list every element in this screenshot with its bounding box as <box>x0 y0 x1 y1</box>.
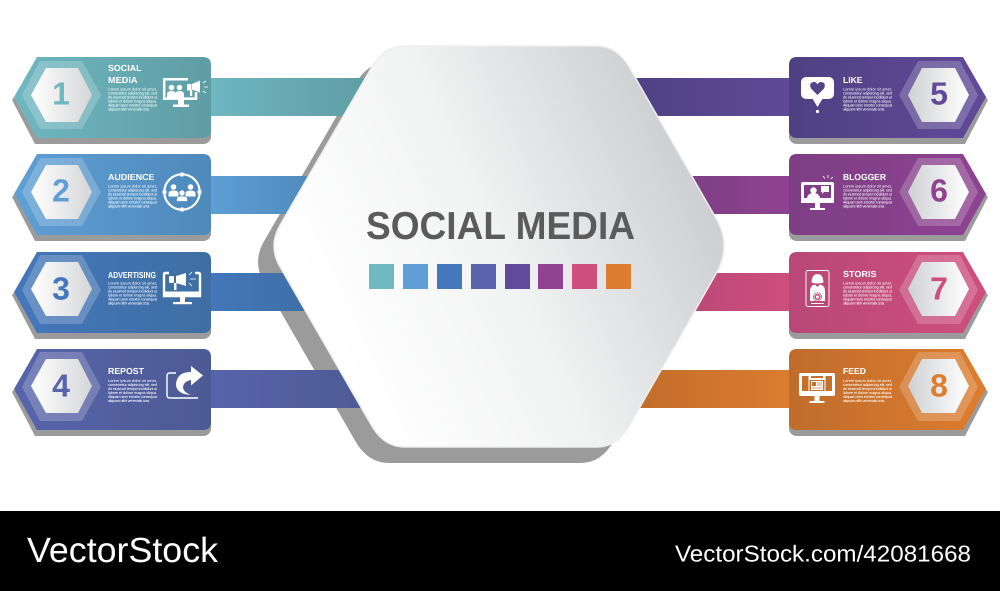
heading: like: LIKE <box>843 75 863 85</box>
footer url text: VectorStock.com/42081668 <box>675 540 971 566</box>
body text 5: consectetur adipiscing elit, sed <box>843 90 892 95</box>
panel: 6 blogger <box>789 154 988 241</box>
body text 3: labore et dolore magna aliqua. <box>108 293 157 298</box>
body text 5: Lorem ipsum dolor sit amet, <box>843 86 892 91</box>
hexagon ring 2 <box>22 158 101 226</box>
body text 3: Aliquam sem et tortor consequat <box>108 297 158 302</box>
number 4: 4 <box>52 368 70 404</box>
body text 5: aliquam nibh venenatis cras. <box>843 106 885 111</box>
body text 5: Aliquam sem et tortor consequat <box>843 102 893 107</box>
body text 6: do eiusmod tempor incididunt ut <box>843 191 893 196</box>
body text 3: consectetur adipiscing elit, sed <box>108 285 157 290</box>
icon: monitor with megaphone <box>164 272 200 304</box>
panel: 4 repost <box>12 349 211 436</box>
body text 2: do eiusmod tempor incididunt ut <box>108 191 158 196</box>
body text 3: Lorem ipsum dolor sit amet, <box>108 281 157 286</box>
body text 8: do eiusmod tempor incididunt ut <box>843 386 893 391</box>
body text 6: Aliquam sem et tortor consequat <box>843 199 893 204</box>
panel: 5 like <box>789 57 988 144</box>
heading: blogger: BLOGGER <box>843 172 887 182</box>
body text 7: aliquam nibh venenatis cras. <box>843 301 885 306</box>
colour swatches <box>369 264 631 289</box>
body text 4: do eiusmod tempor incididunt ut <box>108 386 158 391</box>
footer logo text: VectorStock <box>27 531 219 570</box>
body text 3: aliquam nibh venenatis cras. <box>108 301 150 306</box>
number hexagon 8 <box>908 359 969 413</box>
number 6: 6 <box>930 172 948 208</box>
icon: monitor with blogger <box>801 175 834 210</box>
hexagon ring 8 <box>899 352 978 421</box>
panel: 2 audience <box>12 154 211 241</box>
body text 8: aliquam nibh venenatis cras. <box>843 398 885 403</box>
body text 7: Aliquam sem et tortor consequat <box>843 297 893 302</box>
number hexagon 7 <box>908 262 969 316</box>
number 5: 5 <box>930 76 948 112</box>
heading: repost: REPOST <box>108 366 145 376</box>
panel: 3 advertising <box>12 252 211 339</box>
body text 2: labore et dolore magna aliqua. <box>108 195 157 200</box>
body text 1: consectetur adipiscing elit, sed <box>108 90 157 95</box>
hexagon ring 1 <box>22 61 101 129</box>
number 7: 7 <box>930 270 948 306</box>
body text 8: consectetur adipiscing elit, sed <box>843 382 892 387</box>
body text 6: labore et dolore magna aliqua. <box>843 195 892 200</box>
footer band <box>0 511 1000 591</box>
body text 6: Lorem ipsum dolor sit amet, <box>843 183 892 188</box>
title: SOCIAL MEDIA <box>366 205 635 248</box>
body text 7: do eiusmod tempor incididunt ut <box>843 289 893 294</box>
number hexagon 6 <box>908 165 969 219</box>
number 3: 3 <box>52 270 70 306</box>
panel: 7 storis <box>789 252 988 339</box>
heading: feed: FEED <box>843 366 866 376</box>
body text 8: Aliquam sem et tortor consequat <box>843 394 893 399</box>
number hexagon 3 <box>31 262 92 316</box>
body text 5: do eiusmod tempor incididunt ut <box>843 94 893 99</box>
number hexagon 2 <box>31 165 92 219</box>
number hexagon 1 <box>31 68 92 122</box>
body text 7: labore et dolore magna aliqua. <box>843 293 892 298</box>
body text 1: Aliquam sem et tortor consequat <box>108 102 158 107</box>
body text 8: labore et dolore magna aliqua. <box>843 390 892 395</box>
heading: storis: STORIS <box>843 269 877 279</box>
body text 4: Aliquam sem et tortor consequat <box>108 394 158 399</box>
body text 5: labore et dolore magna aliqua. <box>843 98 892 103</box>
body text 6: aliquam nibh venenatis cras. <box>843 203 885 208</box>
icon: repost arrow <box>167 366 203 398</box>
icon: heart speech bubble <box>801 77 834 113</box>
body text 4: consectetur adipiscing elit, sed <box>108 382 157 387</box>
icon: monitor with audience and megaphone <box>164 79 208 107</box>
body text 1: Lorem ipsum dolor sit amet, <box>108 86 157 91</box>
body text 2: Aliquam sem et tortor consequat <box>108 199 158 204</box>
panel: 1 social media <box>12 57 211 144</box>
body text 4: aliquam nibh venenatis cras. <box>108 398 150 403</box>
body text 4: labore et dolore magna aliqua. <box>108 390 157 395</box>
heading: audience: AUDIENCE <box>108 172 155 182</box>
heading: advertising: ADVERTISING <box>108 270 156 280</box>
body text 1: aliquam nibh venenatis cras. <box>108 106 150 111</box>
number 1: 1 <box>52 76 70 112</box>
hexagon ring 3 <box>22 255 101 324</box>
body text 2: Lorem ipsum dolor sit amet, <box>108 183 157 188</box>
body text 2: consectetur adipiscing elit, sed <box>108 187 157 192</box>
body text 1: labore et dolore magna aliqua. <box>108 98 157 103</box>
icon: audience circle <box>162 172 202 212</box>
number 2: 2 <box>52 172 70 208</box>
body text 8: Lorem ipsum dolor sit amet, <box>843 378 892 383</box>
hexagon ring 6 <box>899 158 978 226</box>
body text 7: Lorem ipsum dolor sit amet, <box>843 281 892 286</box>
body text 1: do eiusmod tempor incididunt ut <box>108 94 158 99</box>
body text 3: do eiusmod tempor incididunt ut <box>108 289 158 294</box>
central hexagon shadow <box>258 62 708 463</box>
number hexagon 4 <box>31 359 92 413</box>
icon: story card <box>806 270 829 306</box>
body text 7: consectetur adipiscing elit, sed <box>843 285 892 290</box>
central hexagon <box>274 46 724 447</box>
body text 2: aliquam nibh venenatis cras. <box>108 203 150 208</box>
heading: social media: MEDIA <box>108 75 138 85</box>
panel: 8 feed <box>789 349 988 436</box>
number hexagon 5 <box>908 68 969 122</box>
hexagon ring 4 <box>22 352 101 421</box>
connector bars <box>205 78 795 408</box>
body text 4: Lorem ipsum dolor sit amet, <box>108 378 157 383</box>
hexagon ring 7 <box>899 255 978 324</box>
body text 6: consectetur adipiscing elit, sed <box>843 187 892 192</box>
hexagon ring 5 <box>899 61 978 129</box>
icon: monitor with feed <box>799 373 835 403</box>
heading: social media: SOCIAL <box>108 63 142 73</box>
number 8: 8 <box>930 368 948 404</box>
